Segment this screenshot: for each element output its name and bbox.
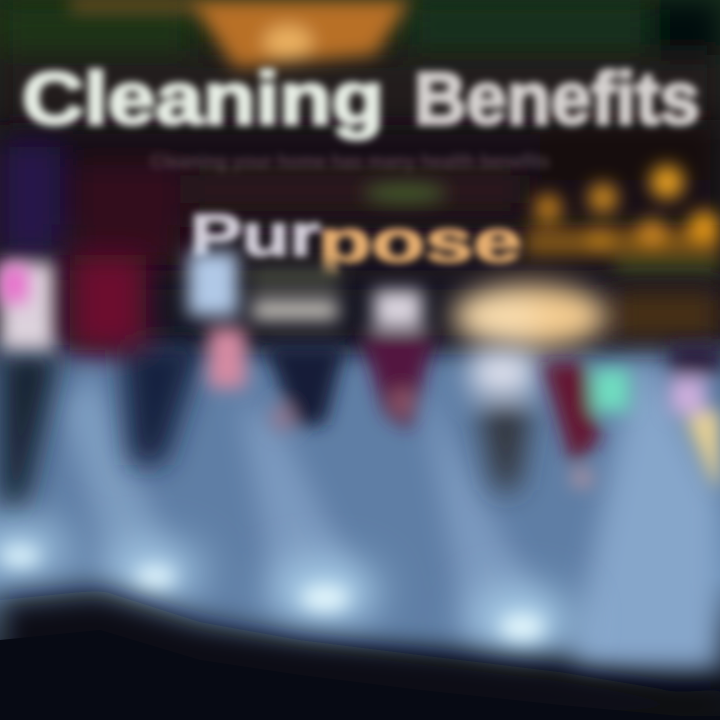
panel: drip 5 plum (360, 290, 435, 430)
title: Benefits (414, 57, 700, 140)
heading: Pur (190, 202, 320, 269)
panel: drip 8 right side (670, 345, 720, 490)
title (22, 57, 700, 140)
panel: dark ground (0, 590, 720, 720)
panel: drip 6 grey (472, 352, 532, 490)
heading: pose (318, 208, 522, 275)
subtitle: Cleaning your home has many health benefits (150, 151, 550, 173)
icon: bright glow spots (0, 522, 574, 650)
panel: drip 4 navy (250, 268, 345, 432)
panel: drip 1 pink card (0, 262, 60, 510)
heading (190, 202, 522, 275)
icon: golden top ornament (70, 0, 410, 68)
panel: lower blue field (0, 345, 720, 670)
callout: gold oval (452, 284, 608, 348)
panel: dark row behind cards (60, 280, 720, 345)
panel: top banner (0, 0, 720, 130)
panel: drip 7 crimson and mint (542, 362, 630, 488)
panel: drip 3 light blue (188, 252, 246, 388)
icon: golden lights row (525, 165, 720, 274)
icon: green accent above heading (363, 183, 447, 203)
panel: drip 2 maroon (70, 255, 205, 465)
panel: dark middle band (0, 120, 720, 265)
title: Cleaning (22, 57, 384, 140)
